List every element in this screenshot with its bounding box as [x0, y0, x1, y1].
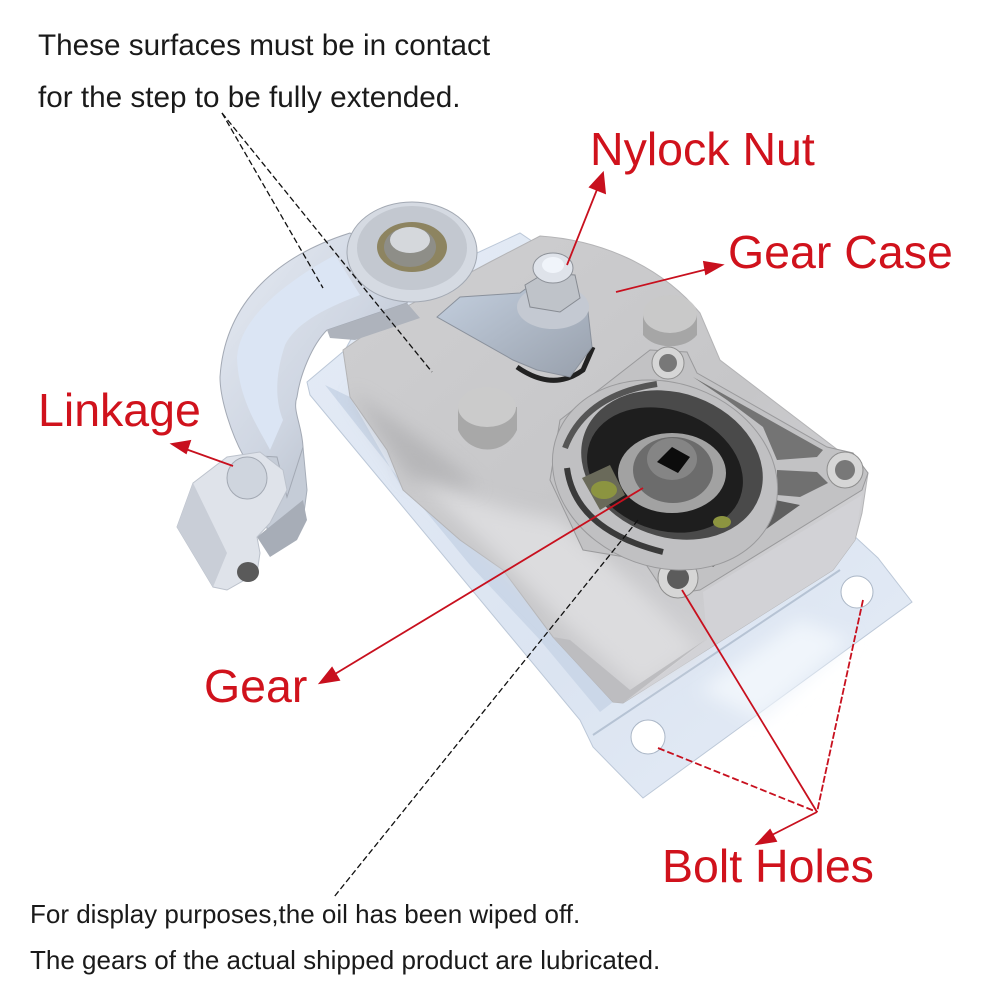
label: Gear: Gear [204, 660, 307, 712]
arm channel [237, 255, 360, 450]
note: display purposes: The gears of the actual shipped product are lubricated. [30, 945, 660, 975]
linkage end block [177, 452, 307, 590]
upper boss [643, 295, 697, 346]
gear hub [618, 433, 726, 513]
bolt hole right [841, 576, 873, 608]
label: Gear Case: Gear Case [728, 226, 953, 278]
nylock nut [517, 253, 589, 329]
lower boss [458, 387, 517, 450]
label: Linkage: Linkage [38, 384, 201, 436]
gear case [343, 236, 868, 703]
note: surfaces in contact: for the step to be fully extended. [38, 81, 460, 114]
label: Nylock Nut: Nylock Nut [590, 123, 815, 175]
red arrows [172, 173, 863, 844]
threaded hole top [652, 347, 684, 379]
linkage arm [220, 233, 420, 545]
threaded hole right [827, 452, 863, 488]
flange pockets [693, 377, 823, 460]
note: surfaces in contact: These surfaces must be in contact [38, 29, 491, 62]
dashed leader lines [222, 113, 638, 897]
label: Bolt Holes: Bolt Holes [662, 840, 874, 892]
note: display purposes: For display purposes,the oil has been wiped off. [30, 899, 580, 929]
mounting plate [307, 233, 912, 798]
motor mount flange [525, 347, 868, 601]
threaded hole bottom [658, 558, 698, 598]
note: display purposes [30, 899, 660, 975]
output arm [437, 273, 593, 380]
case shading [400, 460, 700, 690]
ring and cavity [525, 349, 805, 601]
bearing [347, 202, 477, 302]
bolt hole left [631, 720, 665, 754]
note: surfaces in contact [38, 29, 491, 114]
